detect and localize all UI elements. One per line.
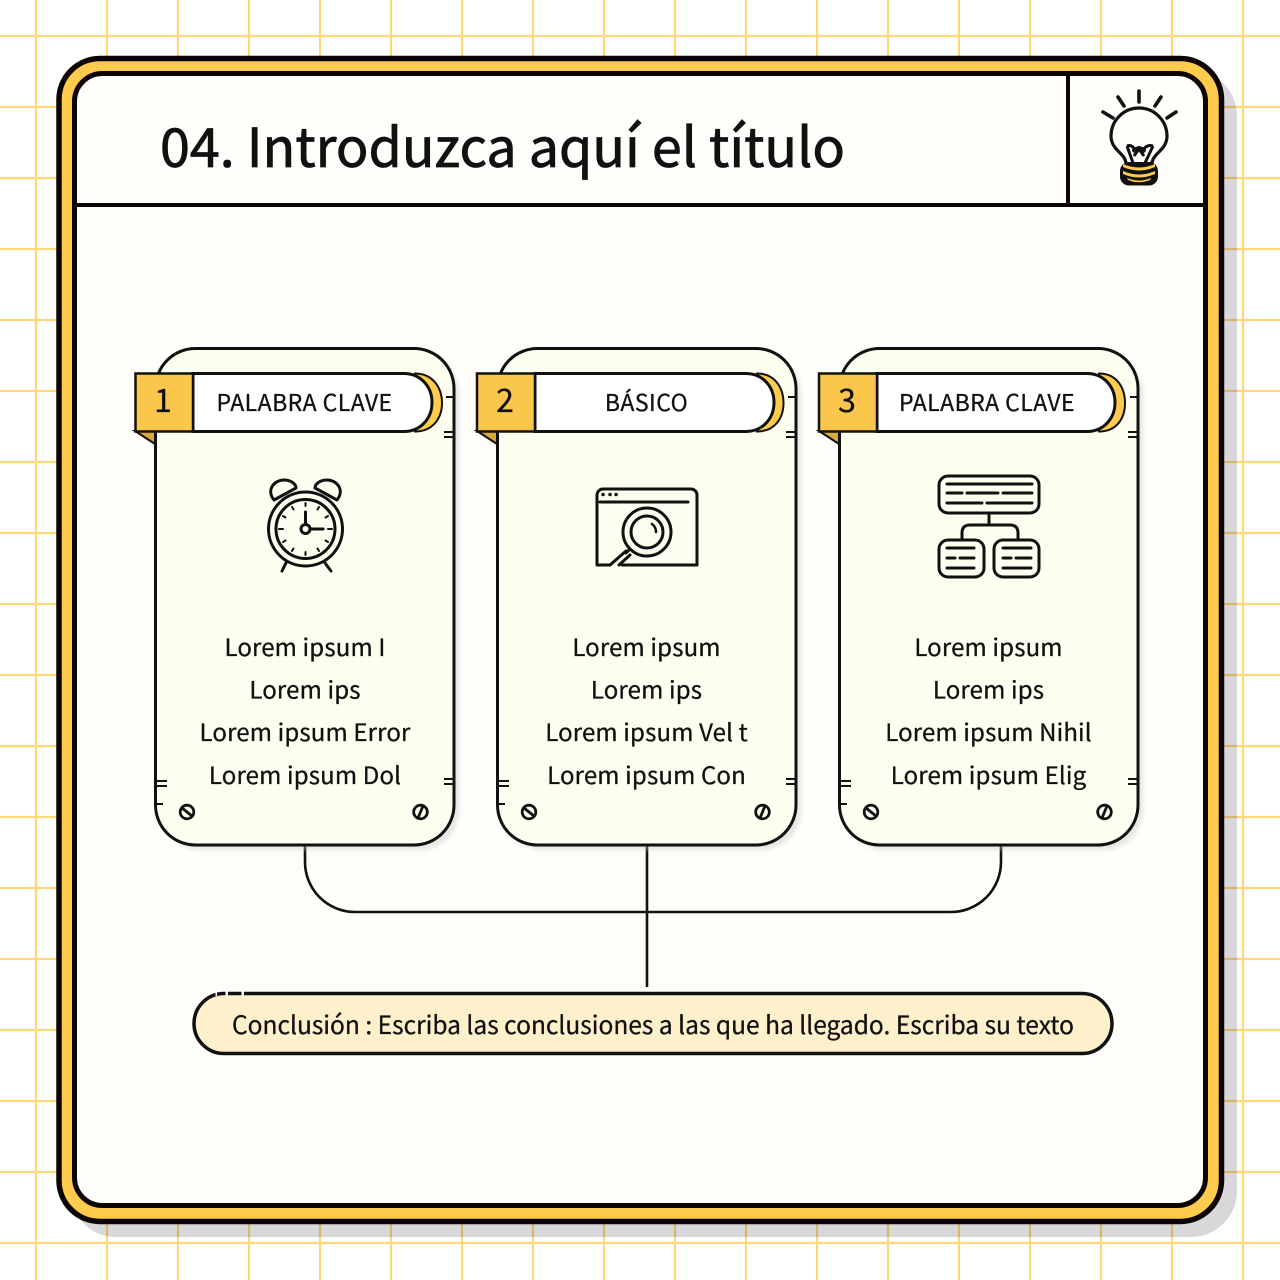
screws (180, 805, 427, 819)
panel: card 2 (477, 348, 801, 850)
panel: card 3 (819, 348, 1143, 850)
text block (545, 628, 748, 791)
ribbon: number and keyword (477, 374, 784, 444)
text block: Lorem ipsum Vel t (545, 713, 748, 748)
ribbon: number and keyword: 1 (154, 376, 172, 422)
screws (522, 805, 769, 819)
text block: Lorem ips (591, 670, 702, 706)
text block: Lorem ipsum Dol (209, 756, 401, 791)
header band (76, 76, 1205, 205)
text block: Lorem ipsum Nihil (885, 713, 1092, 748)
text block: Lorem ipsum (914, 628, 1063, 663)
callout: conclusion (194, 994, 1112, 1054)
ribbon: number and keyword: PALABRA CLAVE (899, 384, 1075, 418)
ribbon: number and keyword (135, 374, 442, 444)
text block: Lorem ipsum Elig (891, 756, 1087, 791)
title: 04. Introduzca aquí el título (160, 104, 845, 183)
text block: Lorem ipsum I (224, 628, 386, 663)
text block: Lorem ipsum (572, 628, 721, 663)
text block: Lorem ipsum Con (547, 756, 746, 791)
panel: card 1 (135, 348, 459, 850)
icon: light bulb (1103, 91, 1176, 186)
icon: alarm clock (268, 480, 342, 571)
ribbon: number and keyword: BÁSICO (605, 384, 688, 418)
ribbon: number and keyword (819, 374, 1125, 444)
icon: browser window with magnifier (597, 489, 697, 565)
icon: hierarchy diagram (939, 476, 1039, 577)
callout: conclusion: Conclusión : Escriba las conclusiones a las que ha llegado. Escriba su texto (232, 1006, 1074, 1042)
text block (885, 628, 1092, 791)
ribbon: number and keyword: 2 (496, 376, 514, 422)
ribbon: number and keyword: PALABRA CLAVE (216, 384, 393, 418)
screws (864, 805, 1111, 819)
ribbon: number and keyword: 3 (838, 376, 856, 422)
text block: Lorem ips (933, 670, 1044, 706)
text block: Lorem ipsum Error (200, 713, 411, 748)
connector lines (305, 845, 1001, 987)
text block: Lorem ips (249, 670, 361, 706)
text block (200, 628, 411, 791)
